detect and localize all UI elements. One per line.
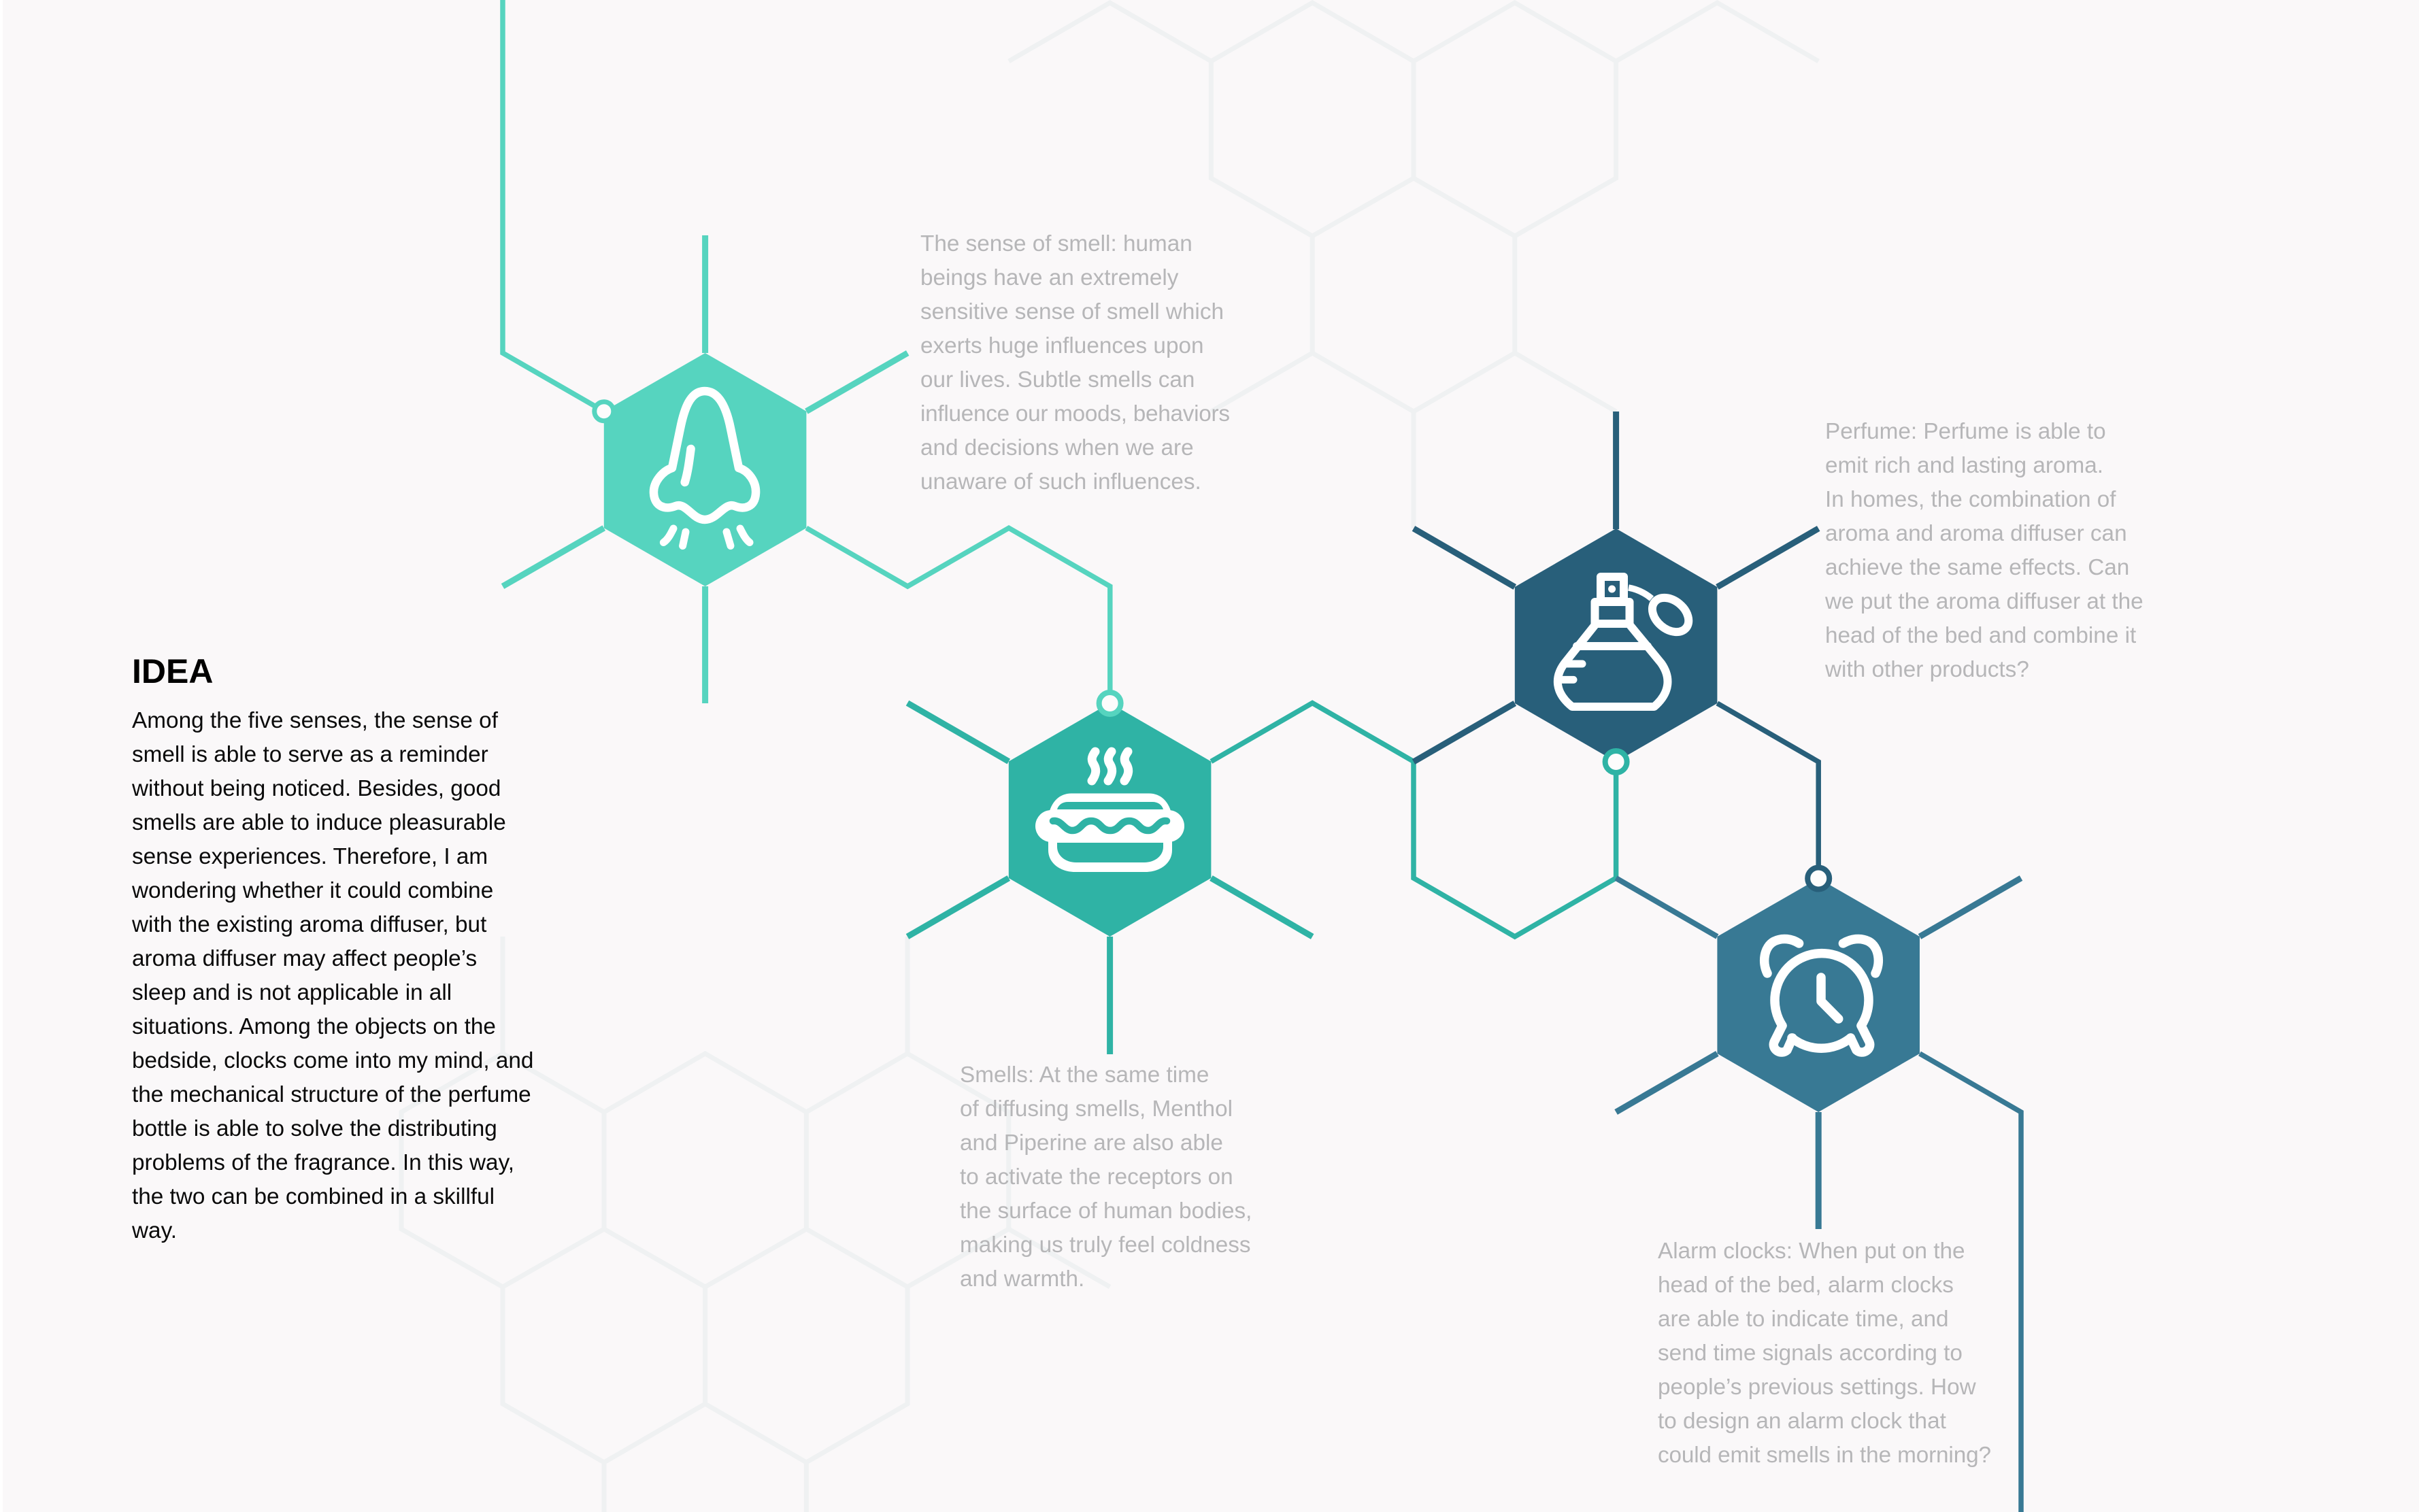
text block: idea body: smells are able to induce pleasurable <box>132 810 506 835</box>
text block: sense of smell: sensitive sense of smell which <box>920 299 1224 324</box>
nose connectors <box>503 0 1110 703</box>
heading: IDEA: IDEA <box>132 652 213 690</box>
text block: sense of smell <box>920 231 1230 494</box>
text block: smells <box>960 1062 1252 1292</box>
text block: idea body: without being noticed. Besides, good <box>131 776 501 801</box>
text block: perfume: we put the aroma diffuser at the <box>1824 589 2143 614</box>
text block: alarm clocks: head of the bed, alarm clocks <box>1658 1273 1954 1298</box>
icon: nose <box>654 391 756 545</box>
text block: idea body: bedside, clocks come into my mind, and <box>132 1048 533 1073</box>
food hexagon <box>1009 703 1211 937</box>
node 1: nose hexagon with connectors <box>503 0 1110 703</box>
node 2: food hexagon with connectors <box>907 692 1616 1054</box>
text block: alarm clocks: Alarm clocks: When put on the <box>1658 1239 1965 1264</box>
text block: idea body: Among the five senses, the sense of <box>132 708 499 733</box>
node 4: alarm clock hexagon with connectors <box>1616 868 2021 1512</box>
icon: perfume bottle <box>1558 577 1695 707</box>
text block: smells: and Piperine are also able <box>960 1130 1223 1156</box>
food connector dot <box>1099 692 1121 714</box>
text block: perfume: head of the bed and combine it <box>1825 623 2136 648</box>
text block: sense of smell: exerts huge influences upon <box>920 333 1204 358</box>
text block: perfume: Perfume: Perfume is able to <box>1825 419 2106 444</box>
nose hexagon <box>604 353 806 586</box>
text block: alarm clocks: to design an alarm clock that <box>1658 1409 1946 1434</box>
node 3: perfume hexagon with connectors <box>1414 411 1818 878</box>
text block: perfume <box>1824 419 2143 682</box>
text block: perfume: achieve the same effects. Can <box>1825 555 2129 580</box>
text block: idea body: bottle is able to solve the distributing <box>132 1116 497 1141</box>
text block: alarm clocks: people’s previous settings. How <box>1658 1375 1977 1400</box>
text block: sense of smell: unaware of such influences. <box>920 469 1201 494</box>
text block: alarm clocks: send time signals according to <box>1658 1341 1963 1366</box>
background honeycomb pattern: top <box>1009 3 1818 528</box>
text block: sense of smell: beings have an extremely <box>920 265 1179 290</box>
clock connector dot <box>1807 868 1829 890</box>
perfume connector dot <box>1605 751 1627 773</box>
text block: smells: to activate the receptors on <box>960 1164 1233 1190</box>
perfume connectors <box>1414 411 1818 878</box>
text block: idea body: sense experiences. Therefore, I am <box>132 844 488 869</box>
clock connectors <box>1616 878 2021 1512</box>
text block: alarm clocks: are able to indicate time, and <box>1658 1307 1949 1332</box>
text block: smells: and warmth. <box>960 1266 1084 1292</box>
text block: idea body: wondering whether it could combine <box>131 878 493 903</box>
text block: idea body: way. <box>131 1218 177 1243</box>
text block: idea body <box>131 708 533 1243</box>
text block: idea body: situations. Among the objects on the <box>132 1014 496 1039</box>
icon: steaming hot dog <box>1035 752 1184 872</box>
text block: idea body: with the existing aroma diffuser, but <box>131 912 486 937</box>
text block: idea body: the two can be combined in a skillful <box>132 1184 495 1209</box>
background honeycomb pattern: bottom <box>401 937 1110 1512</box>
text block: smells: Smells: At the same time <box>960 1062 1209 1088</box>
text block: alarm clocks <box>1658 1239 1991 1468</box>
perfume hexagon <box>1515 528 1717 762</box>
text block: smells: the surface of human bodies, <box>960 1198 1252 1224</box>
text block: smells: of diffusing smells, Menthol <box>960 1096 1233 1122</box>
text block: idea body: smell is able to serve as a reminder <box>132 742 488 767</box>
text block: alarm clocks: could emit smells in the morning? <box>1658 1443 1991 1468</box>
text block: sense of smell: our lives. Subtle smells can <box>920 367 1195 392</box>
text block: sense of smell: and decisions when we are <box>920 435 1194 460</box>
nose connector dot <box>595 402 614 421</box>
text block: idea body: sleep and is not applicable in all <box>132 980 452 1005</box>
text block: perfume: with other products? <box>1824 657 2029 682</box>
text block: idea body: aroma diffuser may affect people’s <box>132 946 477 971</box>
text block: perfume: In homes, the combination of <box>1825 487 2116 512</box>
text block: perfume: aroma and aroma diffuser can <box>1825 521 2127 546</box>
icon: alarm clock <box>1765 939 1878 1052</box>
text block: smells: making us truly feel coldness <box>960 1232 1251 1258</box>
text block: idea body: the mechanical structure of the perfume <box>132 1082 531 1107</box>
food connectors <box>907 703 1616 1054</box>
text block: perfume: emit rich and lasting aroma. <box>1825 453 2103 478</box>
text block: idea body: problems of the fragrance. In this way, <box>132 1150 514 1175</box>
text block: sense of smell: influence our moods, behaviors <box>920 401 1230 426</box>
text block: sense of smell: The sense of smell: human <box>920 231 1192 256</box>
clock hexagon <box>1717 879 1920 1112</box>
